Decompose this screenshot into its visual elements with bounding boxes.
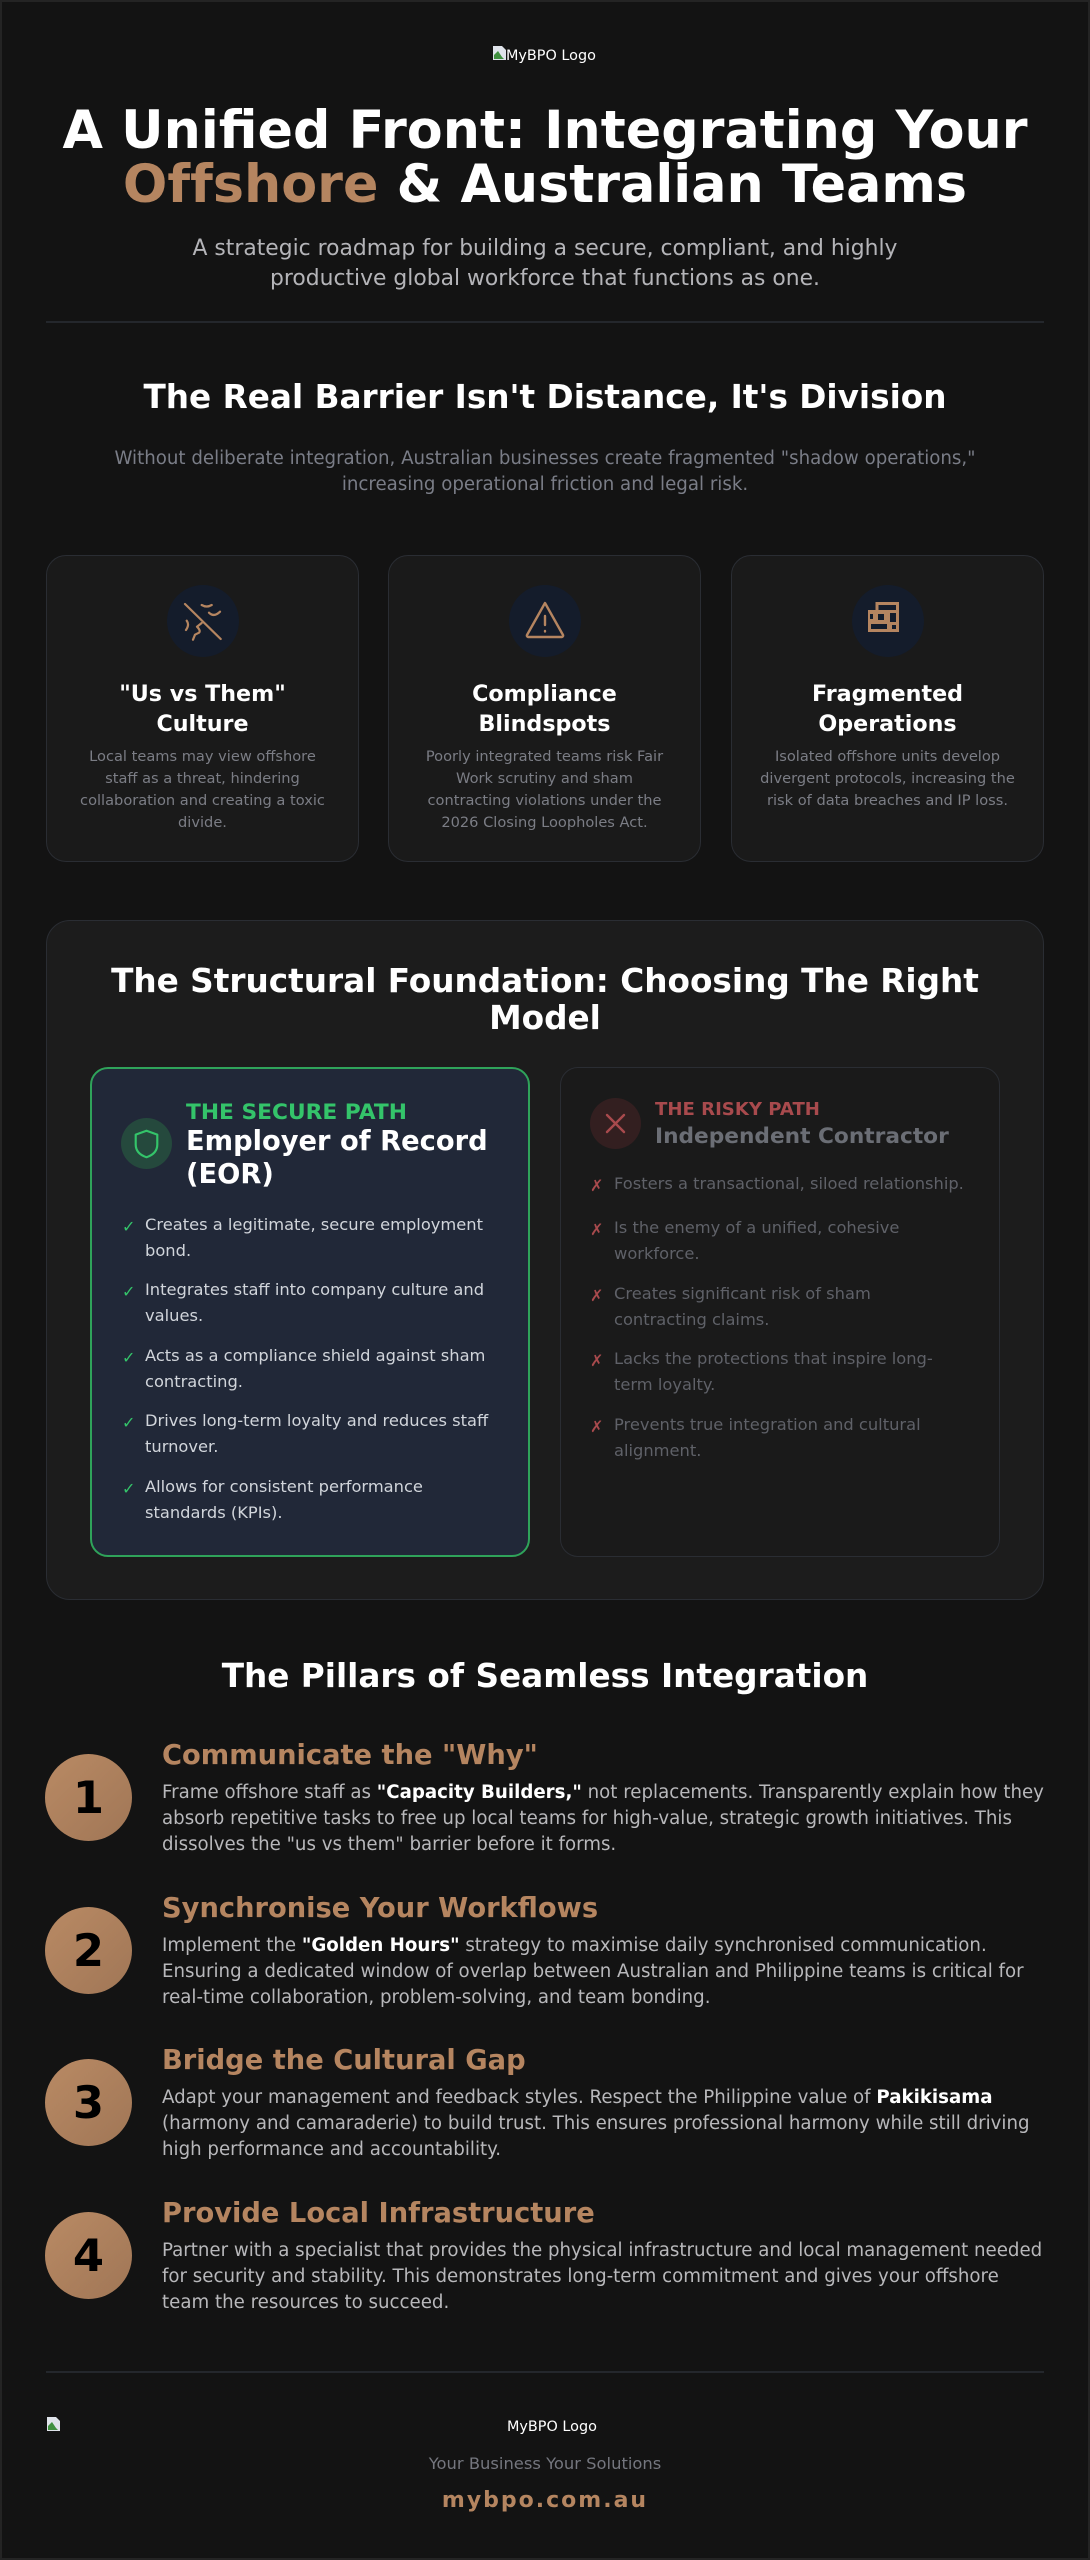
pillar text: real-time collaboration, problem-solving, and team bonding. xyxy=(162,1987,711,2008)
path title: (EOR) xyxy=(186,1158,274,1190)
section heading: pillars: The Pillars of Seamless Integration xyxy=(222,1657,868,1695)
benefits list: ✓ xyxy=(122,1282,135,1301)
benefits list: ✓ xyxy=(122,1413,135,1432)
benefits list: Integrates staff into company culture and xyxy=(145,1280,484,1299)
drawbacks list: Fosters a transactional, siloed relationship. xyxy=(614,1174,964,1193)
pillar text: absorb repetitive tasks to free up local teams for high-value, strategic growth initiatives. This xyxy=(162,1808,1012,1829)
subtitle: productive global workforce that functions as one. xyxy=(270,266,820,290)
panel: structural foundation xyxy=(46,920,1044,1600)
drawbacks list: Is the enemy of a unified, cohesive xyxy=(614,1218,899,1237)
section heading: foundation: Model xyxy=(489,999,601,1037)
card text: risk of data breaches and IP loss. xyxy=(767,792,1008,809)
section intro xyxy=(114,448,976,495)
drawbacks list: Prevents true integration and cultural xyxy=(614,1415,921,1434)
card text xyxy=(760,748,1015,809)
pillar title: Provide Local Infrastructure xyxy=(162,2198,595,2229)
card text: Local teams may view offshore xyxy=(89,748,316,765)
pillar 3 xyxy=(45,2045,1030,2160)
benefits list: Allows for consistent performance xyxy=(145,1477,423,1496)
icon: warning triangle xyxy=(509,585,581,657)
pillar text: team the resources to succeed. xyxy=(162,2292,449,2313)
drawbacks list: ✗ xyxy=(590,1220,603,1239)
card title: Culture xyxy=(156,710,249,736)
number badge: 3 xyxy=(73,2076,104,2129)
number badge xyxy=(45,2059,132,2146)
pillar text: Partner with a specialist that provides the physical infrastructure and local management needed xyxy=(162,2240,1042,2261)
benefits list xyxy=(122,1215,489,1522)
card text: collaboration and creating a toxic xyxy=(80,792,325,809)
card text: divide. xyxy=(178,814,227,831)
drawbacks list: alignment. xyxy=(614,1441,701,1460)
pillar text xyxy=(162,2240,1042,2313)
benefits list: turnover. xyxy=(145,1437,218,1456)
decorative rules xyxy=(46,321,1044,323)
drawbacks list xyxy=(590,1174,964,1460)
pillar text: for security and stability. This demonstrates long-term commitment and gives your offshore xyxy=(162,2266,999,2287)
pillar text: Implement the "Golden Hours" strategy to maximise daily synchronised communication. xyxy=(162,1935,987,1956)
pillar title: Communicate the "Why" xyxy=(162,1740,538,1771)
pillar text: dissolves the "us vs them" barrier before it forms. xyxy=(162,1834,616,1855)
benefits list: ✓ xyxy=(122,1479,135,1498)
card text: Poorly integrated teams risk Fair xyxy=(426,748,663,765)
card text: divergent protocols, increasing the xyxy=(760,770,1015,787)
benefits list: contracting. xyxy=(145,1372,243,1391)
drawbacks list: workforce. xyxy=(614,1244,700,1263)
drawbacks list: Lacks the protections that inspire long- xyxy=(614,1349,933,1368)
pillar text: Frame offshore staff as "Capacity Builders," not replacements. Transparently explain how they xyxy=(162,1782,1044,1803)
drawbacks list: ✗ xyxy=(590,1176,603,1195)
card title xyxy=(119,681,286,736)
pillar text: high performance and accountability. xyxy=(162,2139,501,2160)
drawbacks list: ✗ xyxy=(590,1286,603,1305)
drawbacks list: term loyalty. xyxy=(614,1375,715,1394)
path title: Independent Contractor xyxy=(655,1124,949,1149)
section heading: foundation: The Structural Foundation: Choosing The Right xyxy=(111,962,979,1000)
icon: overlapping squares xyxy=(852,585,924,657)
section intro: Without deliberate integration, Australian businesses create fragmented "shadow operations," xyxy=(114,448,976,469)
card text xyxy=(426,748,664,831)
icon: shield xyxy=(121,1118,172,1169)
card title: Blindspots xyxy=(479,710,610,736)
card title: "Us vs Them" xyxy=(119,681,286,707)
card text: 2026 Closing Loopholes Act. xyxy=(441,814,648,831)
icon: cross xyxy=(590,1098,641,1149)
section intro: increasing operational friction and legal risk. xyxy=(342,474,748,495)
footer logo xyxy=(47,2417,597,2435)
pillar text xyxy=(162,2087,1030,2160)
pillar text xyxy=(162,1935,1024,2008)
path title: Employer of Record xyxy=(186,1126,488,1157)
pillar 1 xyxy=(45,1740,1044,1855)
card text: staff as a threat, hindering xyxy=(105,770,300,787)
card title: Fragmented xyxy=(812,681,963,707)
pillar text: Adapt your management and feedback styles. Respect the Philippine value of Pakikisama xyxy=(162,2087,992,2108)
header logo: MyBPO Logo xyxy=(506,48,596,64)
card text xyxy=(80,748,325,831)
path label: THE SECURE PATH xyxy=(186,1100,407,1125)
card title: Operations xyxy=(818,710,957,736)
card text: Work scrutiny and sham xyxy=(456,770,633,787)
pillar title: Synchronise Your Workflows xyxy=(162,1893,598,1924)
section heading: barrier: The Real Barrier Isn't Distance, It's Division xyxy=(143,378,947,416)
number badge: 2 xyxy=(73,1924,104,1977)
benefits list: Drives long-term loyalty and reduces staff xyxy=(145,1411,488,1430)
card title xyxy=(812,681,963,736)
subtitle: A strategic roadmap for building a secure, compliant, and highly xyxy=(193,236,897,261)
pillar 2 xyxy=(45,1893,1024,2008)
panel: us vs them xyxy=(46,555,359,862)
title: Offshore & Australian Teams xyxy=(123,154,967,215)
benefits list: Acts as a compliance shield against sham xyxy=(145,1346,485,1365)
drawbacks list: ✗ xyxy=(590,1417,603,1436)
footer url: mybpo.com.au xyxy=(442,2488,648,2513)
card title: Compliance xyxy=(472,681,617,707)
benefits list: Creates a legitimate, secure employment xyxy=(145,1215,483,1234)
footer logo: MyBPO Logo xyxy=(507,2419,597,2435)
number badge xyxy=(45,1754,132,1841)
pillar text: Ensuring a dedicated window of overlap between Australian and Philippine teams is critical for xyxy=(162,1961,1024,1982)
drawbacks list: Creates significant risk of sham xyxy=(614,1284,871,1303)
pillar title: Bridge the Cultural Gap xyxy=(162,2045,526,2076)
drawbacks list: ✗ xyxy=(590,1351,603,1370)
panel: compliance xyxy=(388,555,701,862)
subtitle xyxy=(192,236,897,290)
number badge xyxy=(45,2212,132,2299)
card title xyxy=(472,681,617,736)
panel: risky path xyxy=(560,1067,1000,1557)
number badge: 1 xyxy=(73,1771,104,1824)
benefits list: ✓ xyxy=(122,1217,135,1236)
benefits list: values. xyxy=(145,1306,203,1325)
panel: fragmented xyxy=(731,555,1044,862)
benefits list: bond. xyxy=(145,1241,191,1260)
title xyxy=(62,100,1028,215)
benefits list: standards (KPIs). xyxy=(145,1503,283,1522)
benefits list: ✓ xyxy=(122,1348,135,1367)
card text: Isolated offshore units develop xyxy=(775,748,1000,765)
pillar text xyxy=(162,1782,1044,1855)
path title xyxy=(186,1126,488,1190)
title: A Unified Front: Integrating Your xyxy=(62,100,1028,161)
number badge: 4 xyxy=(73,2229,104,2282)
pillar 4 xyxy=(45,2198,1042,2313)
panel: secure path xyxy=(90,1067,530,1557)
drawbacks list: contracting claims. xyxy=(614,1310,769,1329)
icon: broken team link xyxy=(167,585,239,657)
number badge xyxy=(45,1907,132,1994)
path label: THE RISKY PATH xyxy=(655,1099,820,1120)
pillar text: (harmony and camaraderie) to build trust. This ensures professional harmony while still driving xyxy=(162,2113,1030,2134)
section heading: foundation xyxy=(111,962,979,1037)
card text: contracting violations under the xyxy=(428,792,661,809)
footer tagline: Your Business Your Solutions xyxy=(429,2454,661,2473)
